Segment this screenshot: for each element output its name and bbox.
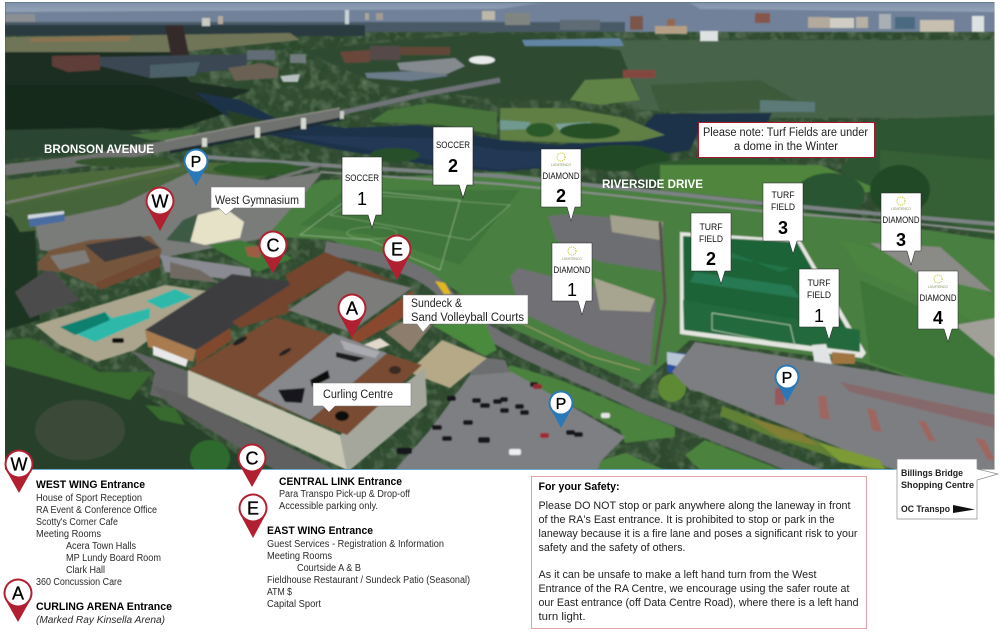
legend: Central Link entrance: CENTRAL LINK Entrance xyxy=(279,476,402,488)
legend: West Wing entrance: Acera Town Halls xyxy=(66,541,136,552)
road label: Riverside Drive: RIVERSIDE DRIVE xyxy=(602,179,703,191)
callout: Turf Field 3: 3 xyxy=(778,218,788,238)
callout: Turf Field 2: TURF xyxy=(700,222,723,232)
legend: East Wing entrance: Courtside A & B xyxy=(297,563,361,574)
hedge xyxy=(720,406,890,470)
bronson road and bridge xyxy=(5,113,340,170)
callout: Curling Centre: Curling Centre xyxy=(323,389,393,401)
callout: Turf Field 3: FIELD xyxy=(771,202,795,212)
callout: Diamond 1 xyxy=(552,243,592,315)
callout: Turf Field 3: TURF xyxy=(772,190,795,200)
icon: C pin: C xyxy=(246,448,258,468)
callout: Billings Bridge and OC Transpo: OC Transpo xyxy=(901,504,950,515)
callout: Diamond 3: 3 xyxy=(896,230,906,250)
field main xyxy=(262,172,995,405)
island lawn xyxy=(500,108,665,143)
callout: turf fields winter dome note: a dome in the Winter xyxy=(734,141,838,153)
pool deck xyxy=(35,285,215,362)
callout: Diamond 4: 4 xyxy=(933,308,943,328)
diamonds xyxy=(510,268,656,366)
icon: W pin: W xyxy=(10,454,28,474)
callout: Turf Field 1: FIELD xyxy=(807,290,831,300)
marker: parking west xyxy=(184,148,208,186)
riverside drive xyxy=(190,156,995,224)
aerial photo background xyxy=(5,2,995,480)
callout: Soccer 2 xyxy=(433,127,473,198)
panel: For your Safety xyxy=(532,476,866,628)
marker: parking centre xyxy=(548,390,574,428)
Carleton tower xyxy=(165,25,189,56)
marker: parking west: P xyxy=(191,154,201,171)
callout: turf fields winter dome note xyxy=(698,122,874,158)
marker: A curling arena xyxy=(338,294,366,338)
callout: Soccer 1: SOCCER xyxy=(345,173,379,183)
west building xyxy=(38,236,162,288)
legend: West Wing entrance: Clark Hall xyxy=(66,565,105,576)
legend: Curling Arena entrance: (Marked Ray Kinsella Arena) xyxy=(36,615,165,626)
callout: Soccer 2: SOCCER xyxy=(436,140,470,150)
trees across xyxy=(570,145,670,171)
callout: Soccer 1 xyxy=(342,157,382,228)
rolling lawn behind riverside xyxy=(660,165,880,205)
panel: For your Safety: Please DO NOT stop or park anywhere along the laneway in front xyxy=(538,500,850,512)
lake xyxy=(522,38,624,46)
callout: Diamond 4 xyxy=(918,271,958,342)
marker: W west wing: W xyxy=(152,192,168,212)
right parking xyxy=(672,342,995,470)
lower parking xyxy=(395,372,625,470)
grass verge xyxy=(5,162,226,210)
marker: E east wing: E xyxy=(391,240,403,260)
legend: Curling Arena entrance xyxy=(4,578,172,626)
callout: Billings Bridge and OC Transpo: Billings Bridge xyxy=(901,468,963,479)
marker: C central link xyxy=(258,230,288,273)
water xyxy=(195,92,772,172)
icon: A pin xyxy=(4,578,32,622)
callout: Turf Field 3 xyxy=(763,183,803,254)
callout: Sundeck and Sand Volleyball Courts xyxy=(403,295,528,332)
legend: West Wing entrance: House of Sport Reception xyxy=(36,493,142,504)
panel: For your Safety: turn light. xyxy=(538,611,586,623)
legend: West Wing entrance: Meeting Rooms xyxy=(36,529,101,540)
callout: Turf Field 2: FIELD xyxy=(699,234,723,244)
marker: parking east xyxy=(774,364,800,402)
icon: E pin xyxy=(238,494,268,538)
skyline xyxy=(202,18,210,26)
legend: East Wing entrance: Guest Services - Registration & Information xyxy=(267,539,444,550)
callout: West Gymnasium: West Gymnasium xyxy=(215,195,299,207)
west parking xyxy=(35,172,322,262)
marker: C central link: C xyxy=(266,236,280,256)
legend: East Wing entrance: Fieldhouse Restaurant / Sundeck Patio (Seasonal) xyxy=(267,575,470,586)
callout: Sundeck and Sand Volleyball Courts: Sand Volleyball Courts xyxy=(411,312,524,324)
photo bottom rule xyxy=(5,469,895,470)
callout: Diamond 2: LIGHTENCO xyxy=(551,163,571,167)
lawn next to bridge xyxy=(370,103,497,135)
callout: Curling Centre xyxy=(313,383,411,412)
panel: For your Safety: For your Safety: xyxy=(538,481,620,493)
panel: For your Safety: laneway because it is a fire lane and poses a significant risk to your xyxy=(538,528,858,540)
road label: Bronson Avenue: BRONSON AVENUE xyxy=(44,144,154,156)
legend: East Wing entrance: ATM $ xyxy=(267,587,292,598)
soccer lines xyxy=(300,190,460,270)
turf xyxy=(680,232,866,358)
callout: Turf Field 1 xyxy=(799,269,839,340)
arena roof xyxy=(288,271,412,332)
icon: W pin xyxy=(4,450,34,493)
panel: For your Safety: of the RA's East entrance. It is prohibited to stop or park in the xyxy=(538,514,834,526)
black roof xyxy=(145,274,300,350)
lawn and drive left xyxy=(5,338,152,400)
sky xyxy=(5,2,995,13)
panel: For your Safety: safety and the safety of others. xyxy=(538,542,686,554)
far dark forest left xyxy=(5,52,250,131)
callout: Turf Field 2: 2 xyxy=(706,249,716,269)
callout: Diamond 3: LIGHTENCO xyxy=(891,207,911,211)
callout: Soccer 1: 1 xyxy=(357,189,367,209)
callout: Diamond 3 xyxy=(881,193,921,265)
legend: East Wing entrance: Capital Sport xyxy=(267,599,321,610)
icon: A pin: A xyxy=(12,584,24,604)
sand court xyxy=(432,320,497,356)
legend: East Wing entrance xyxy=(238,494,470,610)
legend: Central Link entrance: Accessible parking only. xyxy=(279,501,378,512)
curling building xyxy=(188,370,347,470)
fields far left xyxy=(5,33,300,52)
legend: West Wing entrance: WEST WING Entrance xyxy=(36,479,145,491)
campus buildings xyxy=(52,55,100,72)
arrow: OC Transpo direction xyxy=(953,505,975,513)
dome xyxy=(185,208,244,245)
callout: Diamond 1: LIGHTENCO xyxy=(562,257,582,261)
legend: West Wing entrance: RA Event & Conference Office xyxy=(36,505,157,516)
legend: West Wing entrance: Scotty's Corner Cafe xyxy=(36,517,118,528)
marker: parking centre: P xyxy=(556,396,566,413)
callout: Diamond 2 xyxy=(541,149,581,221)
marker: E east wing xyxy=(382,234,412,280)
icon: C pin xyxy=(238,444,266,487)
legend: West Wing entrance xyxy=(4,450,161,588)
legend: Central Link entrance: Para Transpo Pick-up & Drop-off xyxy=(279,489,410,500)
callout: Diamond 2: 2 xyxy=(556,186,566,206)
grass strips near road xyxy=(505,365,675,443)
bus xyxy=(435,281,451,294)
brown link roof xyxy=(232,252,395,328)
callout: Turf Field 2 xyxy=(691,213,731,284)
callout: Turf Field 1: 1 xyxy=(814,306,824,326)
legend: East Wing entrance: Meeting Rooms xyxy=(267,551,332,562)
callout: Billings Bridge and OC Transpo: Shopping Centre xyxy=(901,480,974,491)
callout: Billings Bridge and OC Transpo xyxy=(897,459,998,519)
callout: Diamond 1: DIAMOND xyxy=(554,265,591,275)
callout: turf fields winter dome note: Please note: Turf Fields are under xyxy=(703,127,868,139)
callout: Diamond 4: DIAMOND xyxy=(920,293,957,303)
marker: A curling arena: A xyxy=(346,298,358,318)
legend: Curling Arena entrance: CURLING ARENA Entrance xyxy=(36,601,172,613)
panel: For your Safety: Entrance of the RA Centre, we encourage using the safer route at xyxy=(538,583,850,595)
callout: Diamond 1: 1 xyxy=(567,280,577,300)
callout: Diamond 3: DIAMOND xyxy=(882,215,920,225)
legend: Central Link entrance xyxy=(238,444,410,512)
legend: West Wing entrance: 360 Concussion Care xyxy=(36,577,122,588)
callout: Soccer 2: 2 xyxy=(448,156,458,176)
legend: West Wing entrance: MP Lundy Board Room xyxy=(66,553,161,564)
turf small buildings xyxy=(812,344,832,364)
panel: For your Safety: As it can be unsafe to make a left hand turn from the West xyxy=(538,569,816,581)
legend: East Wing entrance: EAST WING Entrance xyxy=(267,525,373,537)
callout: Diamond 4: LIGHTENCO xyxy=(928,285,948,289)
icon: E pin: E xyxy=(247,498,259,518)
tree row near parking xyxy=(213,162,303,176)
callout: Sundeck and Sand Volleyball Courts: Sundeck & xyxy=(411,298,462,310)
asphalt by west wing xyxy=(15,268,80,318)
marker: W west wing xyxy=(146,186,174,231)
callout: West Gymnasium xyxy=(211,187,305,215)
lower road xyxy=(325,248,830,480)
panel: For your Safety: our East entrance (off Data Centre Road), where there is a left hand xyxy=(538,597,858,609)
callout: Diamond 2: DIAMOND xyxy=(542,171,580,181)
marker: parking east: P xyxy=(782,370,792,387)
callout: Turf Field 1: TURF xyxy=(808,278,831,288)
